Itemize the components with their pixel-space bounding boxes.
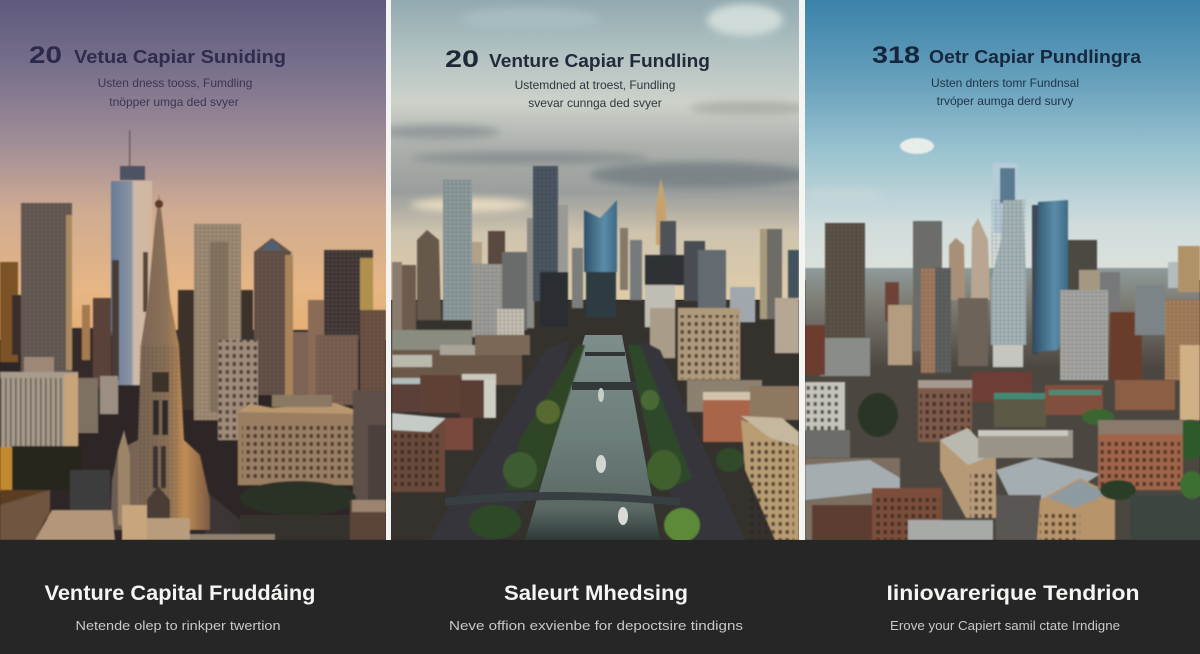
left panel sky bbox=[0, 0, 386, 340]
right panel skyline bbox=[805, 163, 1200, 540]
left panel skyline bbox=[0, 130, 386, 540]
middle panel heading: 20 bbox=[445, 46, 479, 73]
white dividers between panels bbox=[386, 0, 805, 540]
rooftops foreground left bbox=[0, 490, 275, 540]
right panel clouds bbox=[817, 137, 935, 198]
caption: left: Netende olep to rinkper twertion bbox=[76, 618, 280, 633]
right panel heading bbox=[872, 46, 1142, 67]
cathedral bbox=[110, 194, 210, 530]
caption: right bbox=[886, 582, 1140, 633]
panel: left city at dusk bbox=[0, 0, 386, 540]
river with bridges bbox=[525, 335, 660, 540]
caption: left: Venture Capital Fruddáing bbox=[44, 582, 316, 605]
right panel subtitle: Usten dnters tomr Fundnsal bbox=[931, 76, 1079, 90]
middle panel subtitle: Ustemdned at troest, Fundling bbox=[515, 78, 675, 92]
left panel subtitle: tnöpper umga ded svyer bbox=[109, 95, 239, 109]
right foreground buildings bbox=[805, 420, 1200, 540]
middle left buildings bbox=[392, 335, 530, 492]
right mid-rise buildings bbox=[805, 372, 1200, 460]
middle right buildings bbox=[687, 380, 799, 540]
left panel subtitle bbox=[98, 76, 252, 109]
panel: right city under blue sky bbox=[805, 0, 1200, 540]
right panel subtitle bbox=[932, 78, 1078, 108]
right panel heading: Oetr Capiar Pundlingra bbox=[929, 47, 1142, 67]
left panel heading: Vetua Capiar Suniding bbox=[74, 47, 286, 67]
left panel subtitle: Usten dness tooss, Fumdling bbox=[98, 76, 252, 90]
middle panel skyline bbox=[391, 166, 799, 540]
caption: left bbox=[44, 582, 316, 633]
caption: middle bbox=[449, 582, 744, 633]
middle panel subtitle bbox=[516, 80, 675, 110]
main bridge bbox=[445, 492, 680, 506]
left panel heading: 20 bbox=[29, 42, 62, 69]
caption: middle: Neve offion exvienbe for depoctsire tindigns bbox=[449, 618, 744, 633]
caption: middle: Saleurt Mhedsing bbox=[504, 582, 688, 605]
right panel subtitle: trvóper aumga derd survy bbox=[937, 94, 1073, 108]
caption band bbox=[0, 540, 1200, 654]
middle panel heading: Venture Capiar Fundling bbox=[489, 51, 710, 71]
right panel sky bbox=[805, 0, 1200, 280]
right panel heading: 318 bbox=[872, 42, 920, 69]
panel: middle city with river bbox=[380, 0, 810, 542]
middle panel clouds bbox=[380, 4, 810, 212]
middle panel subtitle: svevar cunnga ded svyer bbox=[528, 96, 662, 110]
middle panel sky bbox=[391, 0, 799, 300]
tree lines and roads bbox=[430, 340, 745, 542]
caption: right: Iiniovarerique Tendrion bbox=[886, 582, 1140, 605]
caption: right: Erove your Capiert samil ctate Irndigne bbox=[890, 618, 1120, 633]
